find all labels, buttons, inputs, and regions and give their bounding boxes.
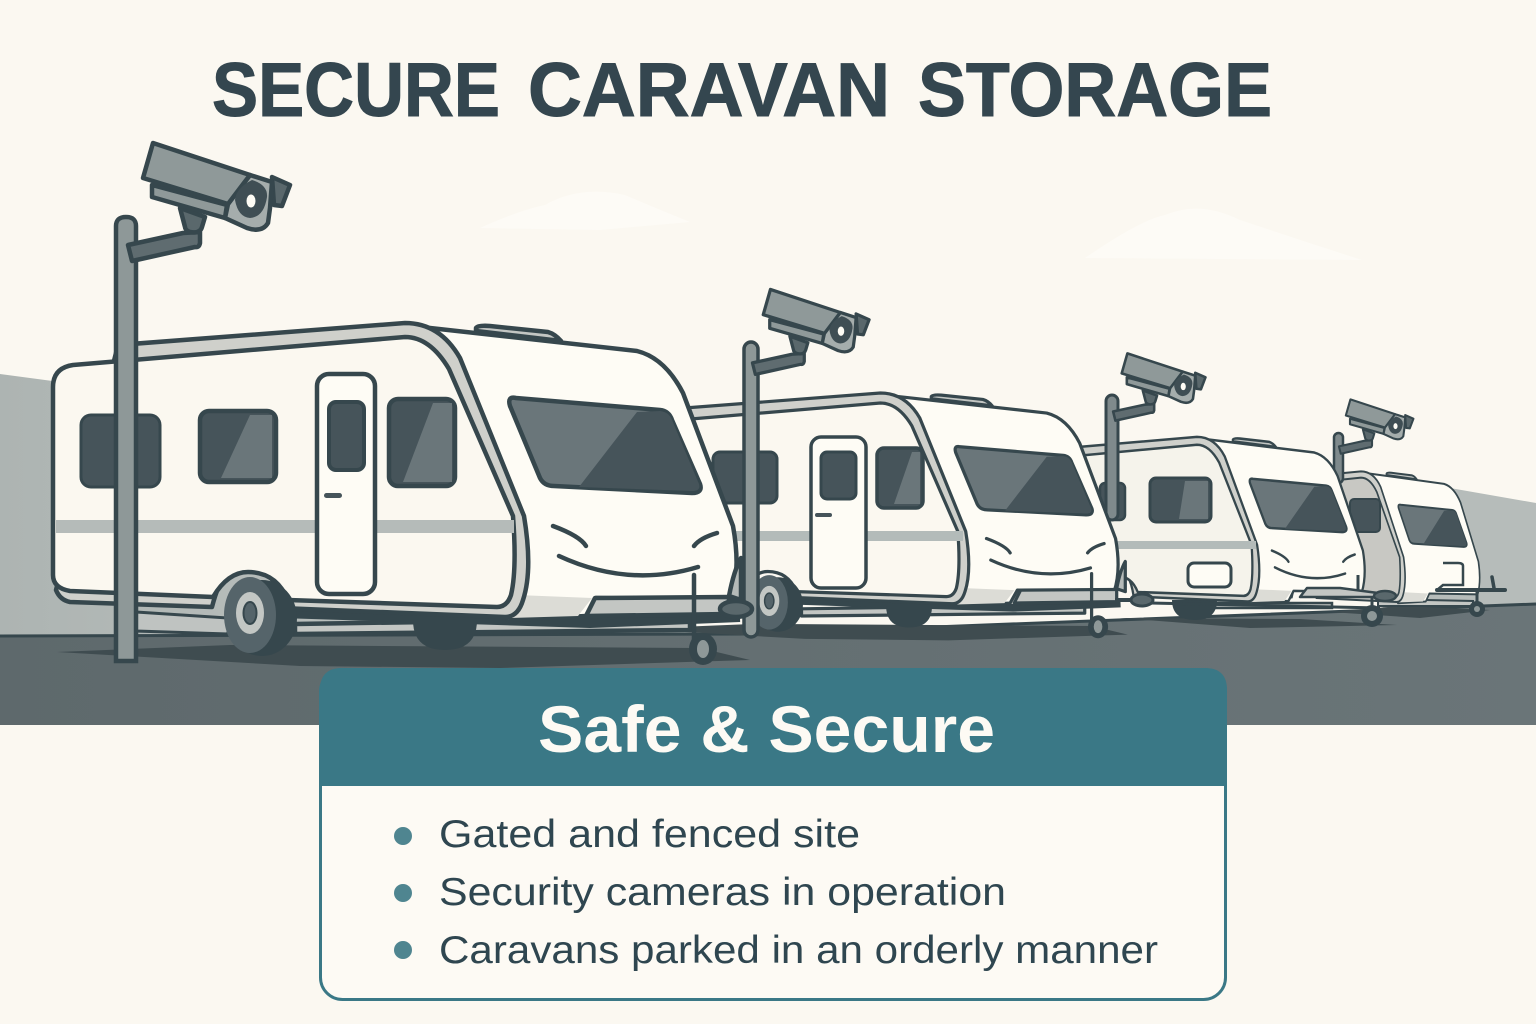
camera 4 with pole — [1334, 399, 1413, 483]
door — [811, 437, 866, 588]
title: CARAVAN — [528, 48, 890, 133]
road — [0, 604, 1536, 725]
camera 3 with pole — [1106, 353, 1205, 520]
panel header — [320, 668, 1227, 786]
bullet 1: Gated and fenced site — [439, 813, 860, 856]
title — [212, 48, 1272, 133]
left hill — [0, 374, 720, 640]
title: SECURE — [212, 48, 500, 133]
caravan 3 — [1019, 437, 1397, 628]
front side window — [389, 399, 455, 486]
bullet 3: Caravans parked in an orderly manner — [439, 929, 1158, 972]
panel heading: Safe & Secure — [538, 692, 995, 766]
rear window — [81, 415, 160, 487]
caravan 2 — [628, 393, 1153, 640]
door — [317, 374, 375, 594]
camera 2 with pole — [744, 289, 869, 637]
clouds — [480, 192, 1362, 260]
camera 1 with pole — [116, 143, 290, 661]
right hill — [1380, 488, 1536, 612]
panel: safe and secure — [320, 668, 1227, 1000]
side window — [1150, 478, 1211, 522]
side window — [200, 411, 276, 482]
drawbar — [1300, 588, 1378, 597]
horizon line — [0, 604, 1536, 636]
title: STORAGE — [918, 48, 1272, 133]
side window — [877, 448, 923, 508]
bullet 2: Security cameras in operation — [439, 871, 1006, 914]
caravan 1 — [53, 323, 752, 668]
caravan 4 — [1235, 471, 1505, 618]
